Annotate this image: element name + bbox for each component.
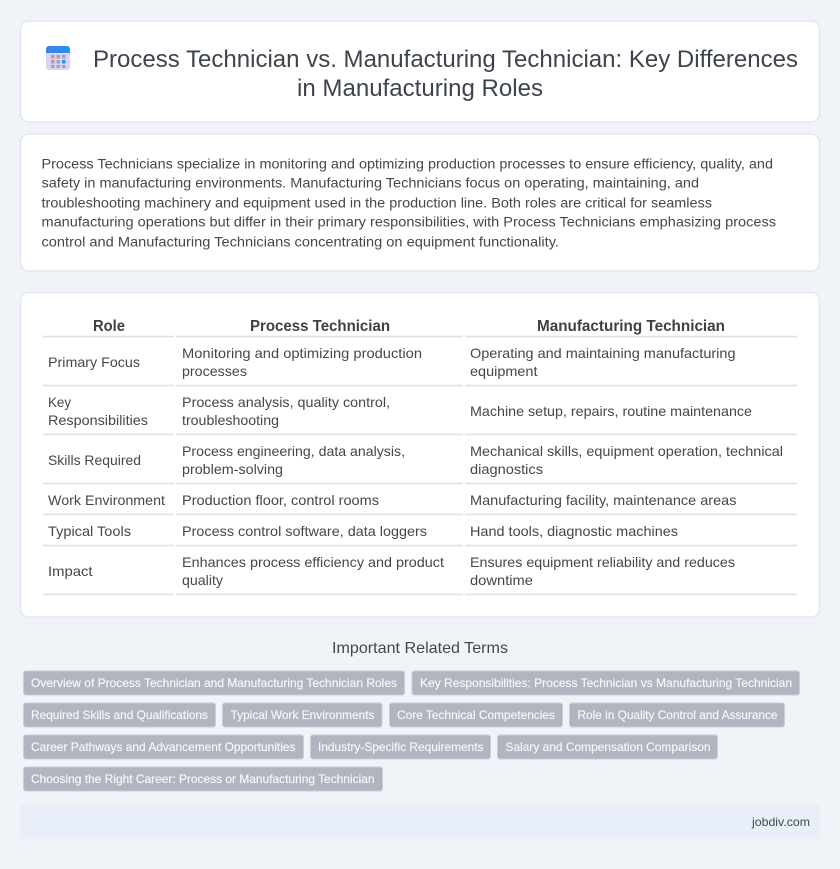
row: skills required: Skills Required bbox=[48, 452, 141, 468]
heading: important related terms: Important Related Terms bbox=[332, 640, 508, 657]
chip: required skills bbox=[24, 703, 216, 727]
panel: comparison table bbox=[20, 292, 820, 617]
row: work environment: Manufacturing facility, maintenance areas bbox=[470, 492, 736, 508]
table header bbox=[93, 318, 725, 335]
row: primary focus: equipment bbox=[470, 363, 538, 379]
table header: Process Technician bbox=[250, 318, 390, 335]
row: key responsibilities bbox=[48, 394, 752, 428]
table header: Manufacturing Technician bbox=[537, 318, 725, 335]
title: in Manufacturing Roles bbox=[297, 75, 543, 102]
row: key responsibilities: Key bbox=[48, 394, 71, 410]
chip: quality control: Role in Quality Control and Assurance bbox=[578, 708, 778, 722]
chip: choosing career: Choosing the Right Career: Process or Manufacturing Technician bbox=[31, 772, 374, 786]
row: typical tools: Typical Tools bbox=[48, 523, 131, 539]
chip: overview: Overview of Process Technician and Manufacturing Technician Roles bbox=[31, 676, 397, 690]
row: work environment bbox=[48, 492, 736, 508]
row: impact bbox=[48, 554, 735, 588]
row: primary focus: Monitoring and optimizing production bbox=[182, 345, 422, 361]
row: typical tools: Hand tools, diagnostic machines bbox=[470, 523, 678, 539]
chip: work environments: Typical Work Environments bbox=[230, 708, 374, 722]
row: primary focus: processes bbox=[182, 363, 247, 379]
text block: introduction bbox=[42, 155, 776, 249]
related term chips bbox=[24, 671, 800, 791]
title: Process Technician vs. Manufacturing Technician: Key Differences bbox=[93, 46, 798, 73]
chip: industry requirements: Industry-Specific Requirements bbox=[318, 740, 484, 754]
row: impact: downtime bbox=[470, 572, 533, 588]
row: work environment: Work Environment bbox=[48, 492, 165, 508]
row: skills required: problem-solving bbox=[182, 461, 283, 477]
chip: work environments bbox=[222, 703, 382, 727]
row: key responsibilities: Process analysis, quality control, bbox=[182, 394, 390, 410]
row: primary focus: Operating and maintaining manufacturing bbox=[470, 345, 736, 361]
row: primary focus bbox=[48, 345, 736, 379]
text block: introduction: safety in manufacturing environments. Manufacturing Technicians focus on operating, maintaining, and bbox=[42, 175, 699, 191]
chip: required skills: Required Skills and Qualifications bbox=[31, 708, 208, 722]
panel: introduction bbox=[20, 134, 820, 271]
row: impact: Enhances process efficiency and product bbox=[182, 554, 444, 570]
table header: Role bbox=[93, 318, 125, 335]
chip: quality control bbox=[570, 703, 784, 727]
text block: introduction: troubleshooting machinery and equipment used in the production line. Both roles are critical for seamless bbox=[42, 194, 712, 210]
chip: salary bbox=[498, 735, 718, 759]
footer bbox=[20, 805, 820, 839]
chip: core competencies: Core Technical Competencies bbox=[397, 708, 555, 722]
row: skills required: Mechanical skills, equipment operation, technical bbox=[470, 443, 783, 459]
row: primary focus: Primary Focus bbox=[48, 354, 140, 370]
row: key responsibilities: troubleshooting bbox=[182, 412, 279, 428]
row: skills required bbox=[48, 443, 783, 477]
row: impact: quality bbox=[182, 572, 223, 588]
row: typical tools bbox=[48, 523, 678, 539]
row: work environment: Production floor, control rooms bbox=[182, 492, 379, 508]
row: typical tools: Process control software, data loggers bbox=[182, 523, 427, 539]
chip: key responsibilities: Key Responsibilities: Process Technician vs Manufacturing Technician bbox=[420, 676, 792, 690]
panel: header bbox=[20, 21, 820, 122]
chip: overview bbox=[24, 671, 404, 695]
chip: industry requirements bbox=[310, 735, 490, 759]
chip: salary: Salary and Compensation Comparison bbox=[506, 740, 710, 754]
icon: calendar bbox=[46, 46, 70, 70]
chip: career pathways: Career Pathways and Advancement Opportunities bbox=[31, 740, 296, 754]
text block: introduction: Process Technicians specialize in monitoring and optimizing production processes to ensure efficiency, quality, and bbox=[42, 155, 773, 171]
footer: jobdiv.com bbox=[751, 815, 810, 829]
row: impact: Impact bbox=[48, 563, 93, 579]
row: impact: Ensures equipment reliability and reduces bbox=[470, 554, 735, 570]
chip: key responsibilities bbox=[412, 671, 800, 695]
row: skills required: Process engineering, data analysis, bbox=[182, 443, 405, 459]
row: key responsibilities: Machine setup, repairs, routine maintenance bbox=[470, 403, 752, 419]
chip: career pathways bbox=[24, 735, 304, 759]
row: skills required: diagnostics bbox=[470, 461, 543, 477]
text block: introduction: manufacturing operations but differ in their primary responsibilities, with Process Technicians emphasizing process bbox=[42, 214, 776, 230]
title bbox=[93, 46, 798, 102]
chip: choosing career bbox=[24, 767, 382, 791]
chip: core competencies bbox=[390, 703, 562, 727]
text block: introduction: control and Manufacturing Technicians concentrating on equipment functionality. bbox=[42, 233, 559, 249]
row: key responsibilities: Responsibilities bbox=[48, 412, 148, 428]
